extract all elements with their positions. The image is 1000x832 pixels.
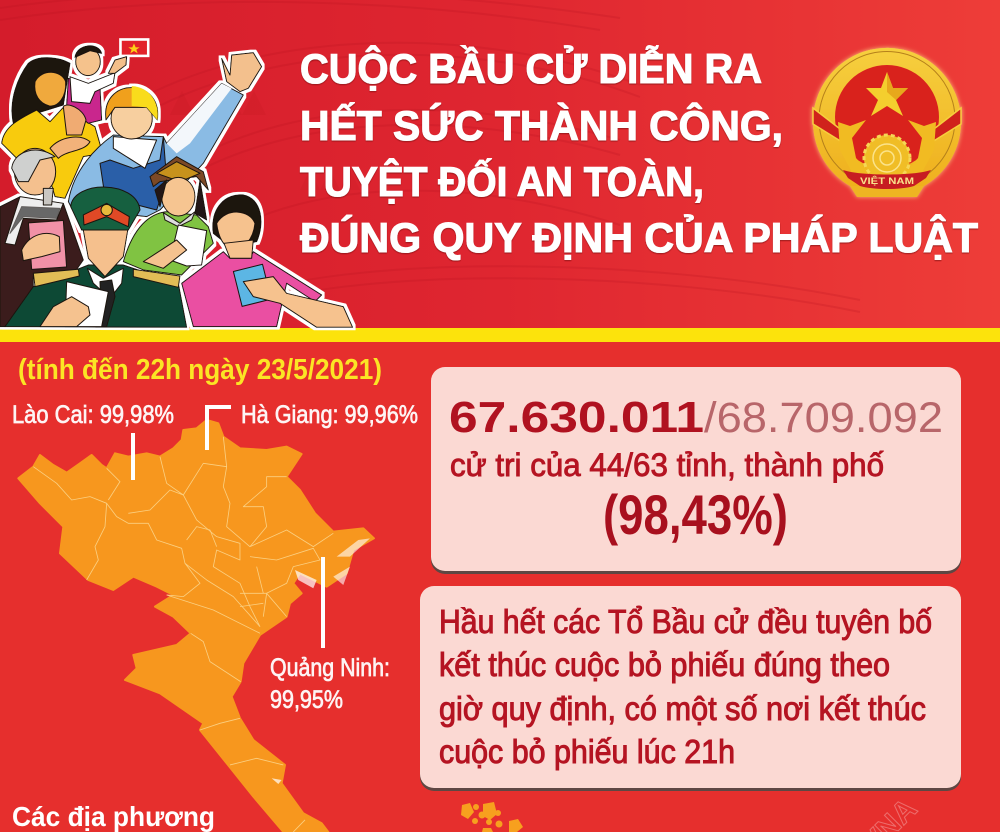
- emblem of Vietnam: [813, 48, 961, 197]
- total voters: /68.709.092: [704, 394, 943, 442]
- note text: [439, 603, 932, 770]
- woman in pink: [182, 195, 353, 327]
- title: TUYỆT ĐỐI AN TOÀN,: [300, 157, 704, 205]
- title: HẾT SỨC THÀNH CÔNG,: [300, 101, 783, 149]
- ethnic woman: [123, 157, 213, 275]
- title: CUỘC BẦU CỬ DIỄN RA: [300, 44, 762, 92]
- title: ĐÚNG QUY ĐỊNH CỦA PHÁP LUẬT: [300, 213, 978, 261]
- emblem of Vietnam: VIỆT NAM: [860, 175, 914, 186]
- old man: [0, 148, 83, 327]
- soldier: [5, 187, 187, 327]
- note text: kết thúc cuộc bỏ phiếu đúng theo: [439, 646, 890, 683]
- worker: [68, 53, 262, 217]
- label: Hà Giang: Hà Giang: 99,96%: [241, 401, 418, 429]
- stat card: [431, 367, 961, 574]
- label: các địa phương: Các địa phương: [12, 801, 215, 832]
- leader line: Lào Cai: [131, 433, 135, 480]
- note card: [420, 586, 961, 791]
- label: Lào Cai: Lào Cai: 99,98%: [12, 401, 174, 429]
- confetti map fragments: [461, 802, 523, 832]
- date note: (tính đến 22h ngày 23/5/2021): [18, 354, 382, 386]
- rice stalks: [838, 120, 936, 180]
- label: Quảng Ninh: 99,95%: [270, 686, 343, 714]
- illustration: voters: [0, 41, 353, 327]
- yellow divider bar: [0, 328, 1000, 342]
- label: Quảng Ninh: [270, 654, 390, 714]
- woman in yellow: [2, 58, 103, 198]
- ribbons: [813, 108, 961, 142]
- header band: [0, 0, 1000, 328]
- flag: [122, 41, 147, 55]
- voter count: 67.630.011: [449, 393, 704, 442]
- star: [866, 72, 908, 116]
- note text: giờ quy định, có một số nơi kết thúc: [439, 690, 926, 727]
- percentage: (98,43%): [603, 483, 788, 546]
- note text: cuộc bỏ phiếu lúc 21h: [439, 733, 735, 770]
- ribbon: [843, 170, 931, 189]
- label: Quảng Ninh: Quảng Ninh:: [270, 654, 390, 682]
- title: [300, 44, 978, 261]
- note text: Hầu hết các Tổ Bầu cử đều tuyên bố: [439, 603, 932, 640]
- voters description: cử tri của 44/63 tỉnh, thành phố: [450, 447, 884, 483]
- map of northern Vietnam: [18, 420, 374, 832]
- gear: [864, 135, 910, 181]
- leader line: Hà Giang: [207, 407, 231, 450]
- child: [63, 46, 127, 135]
- base: [850, 186, 924, 197]
- leader line: Quảng Ninh: [321, 557, 325, 648]
